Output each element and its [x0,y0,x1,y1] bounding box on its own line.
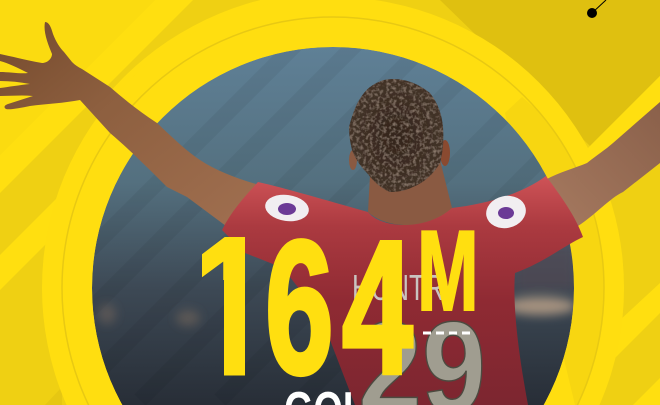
left arm and hand [0,22,256,226]
black pointer dot [587,0,606,18]
sleeve badge right [483,192,529,232]
dashed divider [423,332,472,334]
big figure 164 [202,237,414,378]
sleeve badge left [263,192,311,224]
shirt name: HUNTR [352,267,444,308]
right arm [545,102,660,226]
neck [368,160,452,225]
stadium backdrop circle [92,47,574,405]
jersey [222,176,583,405]
unit M: M [417,208,479,335]
ears [440,140,450,166]
head [349,79,443,192]
